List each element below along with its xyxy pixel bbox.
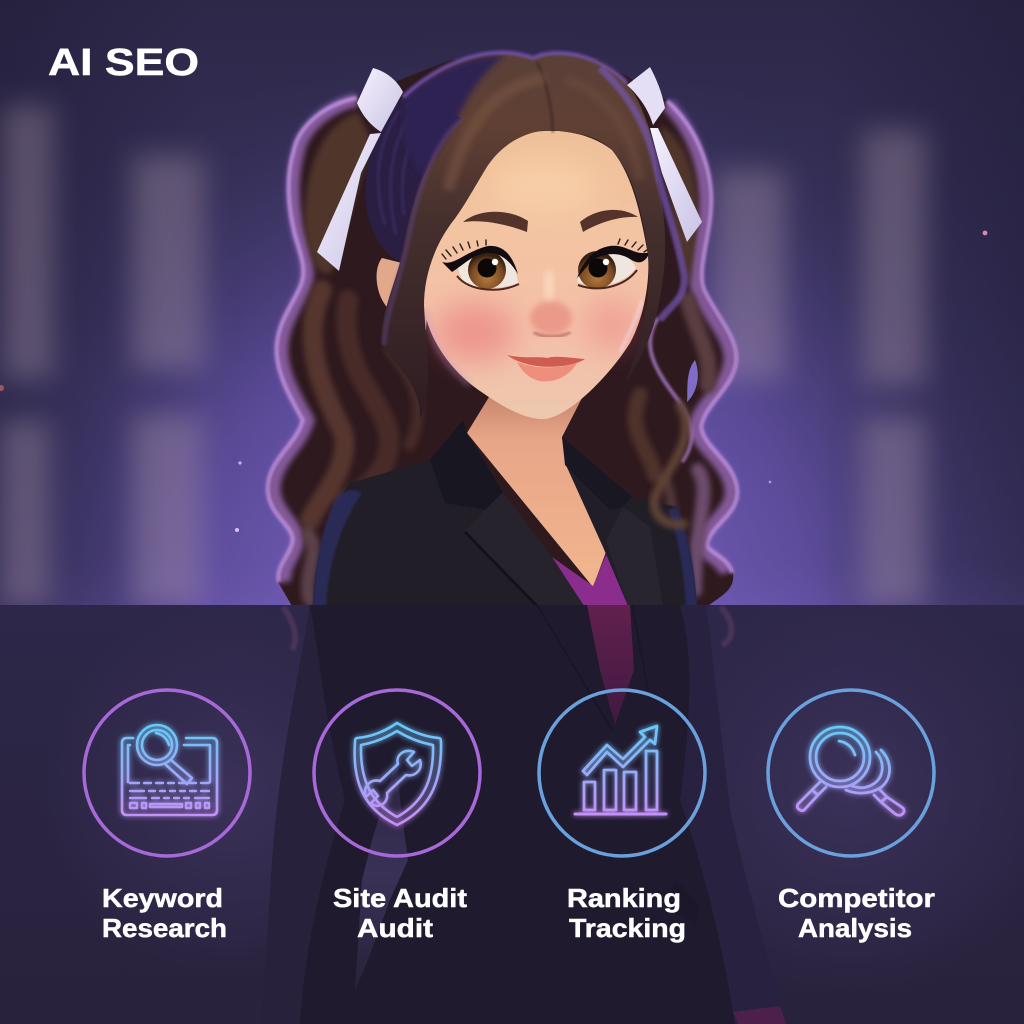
label: Site Audit (333, 883, 467, 913)
title: AI SEO (48, 42, 199, 84)
label: Keyword (102, 883, 223, 913)
feature: site audit (314, 690, 480, 943)
label: Ranking (567, 883, 681, 913)
lower panel (0, 605, 1024, 1024)
crown and front hair (365, 52, 684, 420)
face (424, 131, 650, 419)
label: Research (102, 913, 227, 943)
feature: ranking tracking (539, 690, 705, 943)
label: Tracking (569, 913, 686, 943)
label (333, 883, 467, 943)
label (102, 883, 227, 943)
eyebrows (463, 210, 638, 232)
magenta top (552, 550, 628, 606)
nose (530, 269, 572, 336)
circle ring (314, 690, 480, 856)
character: girl in blazer (267, 52, 738, 606)
feature: keyword research (84, 690, 250, 943)
mouth (507, 355, 585, 381)
circle ring (539, 690, 705, 856)
hair strands (304, 112, 709, 600)
neck and chest (467, 392, 606, 587)
icon: keyboard with magnifier (122, 725, 217, 815)
right eye (577, 239, 650, 289)
icon: bar chart with arrow (575, 726, 666, 814)
ear (377, 258, 430, 332)
back hair (267, 60, 738, 606)
feature: competitor analysis (768, 690, 935, 943)
label (567, 883, 686, 943)
ribbon tails and bows (317, 67, 702, 271)
label: Audit (357, 913, 433, 943)
left eye (442, 240, 519, 290)
icon: two magnifiers (797, 727, 904, 815)
blazer seen through panel (262, 605, 786, 1024)
label: Competitor (778, 883, 935, 913)
icon: shield with wrench (355, 723, 441, 825)
circle ring (84, 690, 250, 856)
label: Analysis (798, 913, 912, 943)
label (778, 883, 935, 943)
blazer (313, 405, 697, 606)
circle ring (768, 690, 934, 856)
